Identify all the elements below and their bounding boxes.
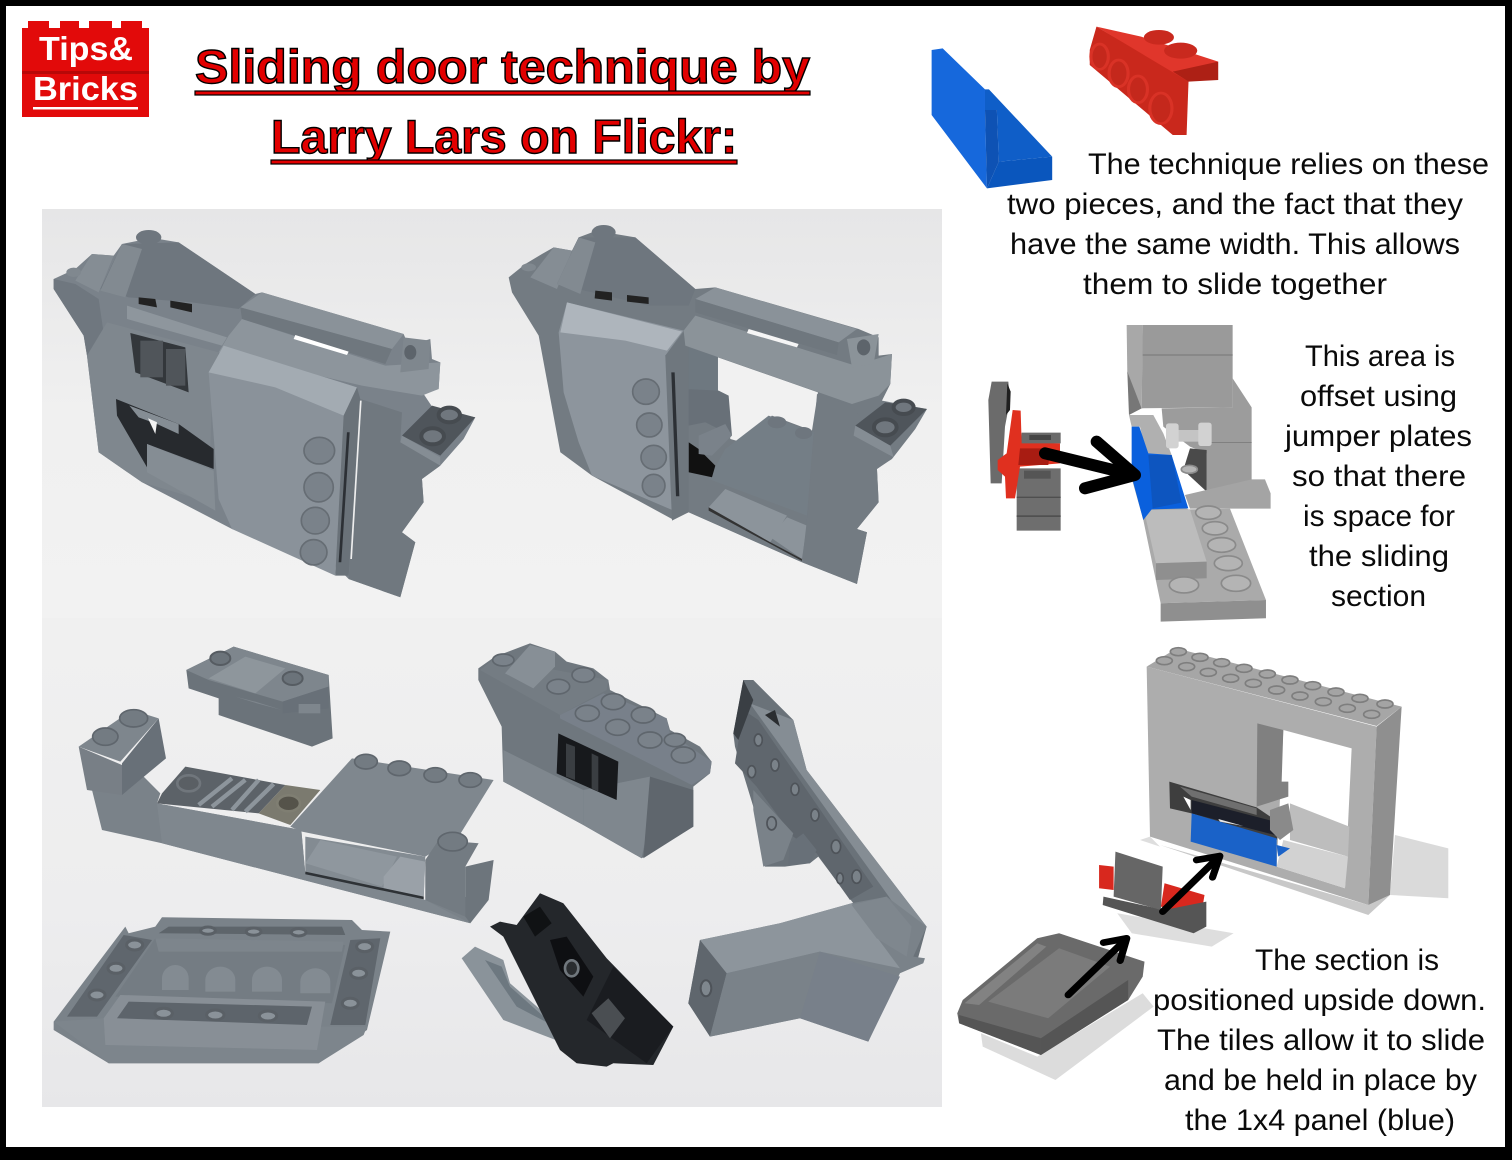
text: offset explanation: This area is xyxy=(1305,340,1455,373)
text: offset explanation: jumper plates xyxy=(1284,420,1472,453)
upper window xyxy=(130,333,189,392)
logo text bottom: Bricks xyxy=(33,70,138,107)
model with door open xyxy=(509,225,927,584)
door xyxy=(559,302,684,511)
inverted roof piece xyxy=(957,933,1154,1080)
panel: photo of assembled model, door closed and open xyxy=(42,209,942,618)
part: long base with studs xyxy=(79,710,494,923)
text: upside-down section explanation: and be held in place by xyxy=(1164,1064,1477,1097)
top studs xyxy=(1156,648,1393,718)
part: black door inner section xyxy=(462,893,673,1067)
text: offset explanation: so that there xyxy=(1292,460,1466,493)
blue panel in place xyxy=(1132,427,1188,520)
diagram: offset area with jumper plates xyxy=(988,325,1271,622)
title xyxy=(195,40,810,164)
arrow: section to wall xyxy=(1163,856,1220,912)
text: offset explanation: the sliding xyxy=(1309,540,1449,573)
text: upside-down section explanation: the 1x4 panel (blue) xyxy=(1185,1104,1455,1137)
door opening xyxy=(1277,730,1352,888)
text: upside-down section explanation: The tiles allow it to slide xyxy=(1157,1024,1485,1057)
arrow xyxy=(1045,442,1135,488)
text: offset explanation: section xyxy=(1331,580,1426,613)
part: angled corner bracket xyxy=(688,897,927,1042)
header beam xyxy=(684,316,892,404)
text: pieces explanation: two pieces, and the fact that they xyxy=(1007,188,1463,221)
arrow: roof piece to section xyxy=(1068,938,1127,995)
title line 2: Larry Lars on Flickr: xyxy=(271,110,737,163)
text: pieces explanation: them to slide together xyxy=(1083,268,1387,301)
section with red bracket xyxy=(988,382,1061,531)
model with door closed xyxy=(54,230,475,597)
text: pieces explanation: The technique relies on these xyxy=(1088,148,1489,181)
diagram: wall with door opening and slot xyxy=(1140,648,1448,915)
base studs xyxy=(1169,465,1251,593)
part: upper wall section with window xyxy=(478,643,712,858)
part: inverted wedge plate xyxy=(54,917,390,1063)
text: upside-down section explanation: positioned upside down. xyxy=(1153,984,1486,1017)
icon group: the two LEGO pieces xyxy=(932,27,1218,188)
door opening xyxy=(718,357,818,442)
axle xyxy=(1178,430,1199,442)
lower window xyxy=(116,399,214,469)
part: small hinge block xyxy=(186,647,333,747)
icon: blue 1x4 panel xyxy=(932,48,1052,188)
floor tiles xyxy=(689,476,809,562)
logo: Tips & Bricks xyxy=(22,21,149,117)
text: pieces explanation xyxy=(1007,148,1489,301)
text: offset explanation: is space for xyxy=(1303,500,1455,533)
right pillar xyxy=(802,394,890,584)
tower and base xyxy=(1127,325,1271,622)
text: upside-down section explanation xyxy=(1153,944,1486,1137)
text: upside-down section explanation: The section is xyxy=(1255,944,1439,977)
sliding door xyxy=(209,346,357,576)
panel: photo of disassembled parts xyxy=(42,618,942,1107)
slot xyxy=(1169,782,1280,840)
diagram: exploded pieces and arrows xyxy=(957,852,1234,1080)
icon: red bracket piece xyxy=(1090,27,1218,135)
sliding section with red brackets xyxy=(1099,852,1234,947)
blue panel xyxy=(1191,813,1277,867)
text: offset explanation: offset using xyxy=(1300,380,1457,413)
logo text top: Tips& xyxy=(39,30,133,67)
text: pieces explanation: have the same width. This allows xyxy=(1010,228,1460,261)
title line 1: Sliding door technique by xyxy=(195,40,810,93)
text: offset explanation xyxy=(1284,340,1472,613)
part: diagonal arm upside-down plate xyxy=(733,680,927,963)
